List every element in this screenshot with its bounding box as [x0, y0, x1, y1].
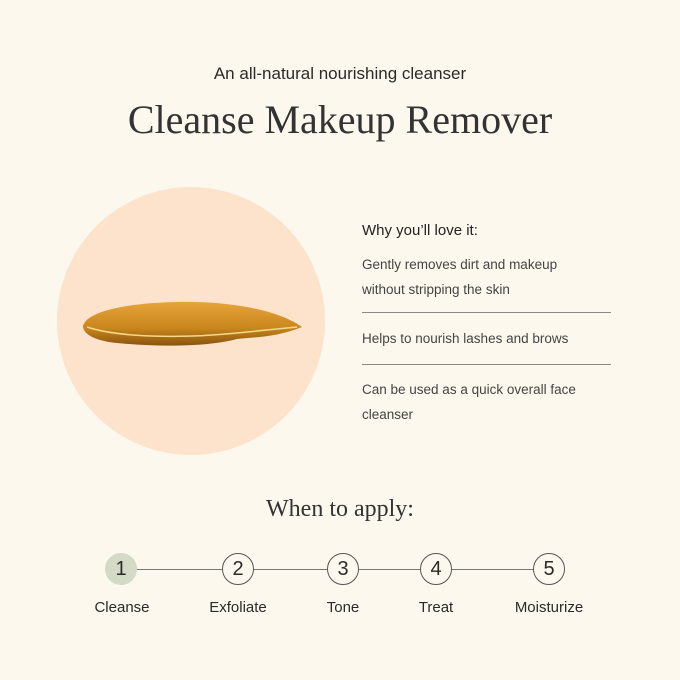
label tone: Tone: [327, 599, 359, 616]
step 2: [222, 553, 254, 585]
benefit 3: [362, 382, 576, 422]
title: Cleanse Makeup Remover: [128, 97, 552, 142]
benefit 2: Helps to nourish lashes and brows: [362, 331, 568, 346]
steps timeline: [136, 569, 534, 570]
subtitle: An all-natural nourishing cleanser: [214, 64, 466, 83]
benefit 1: [362, 257, 557, 297]
label treat: Treat: [419, 599, 453, 616]
step 4: [420, 553, 452, 585]
heading: Why you’ll love it:: [362, 222, 478, 239]
benefit 3: Can be used as a quick overall face: [362, 382, 576, 397]
step 2: 2: [232, 558, 244, 580]
benefit 1: without stripping the skin: [362, 282, 510, 297]
step 5: [533, 553, 565, 585]
step 1: [105, 553, 137, 585]
when to apply heading: When to apply:: [266, 496, 414, 522]
oil swatch: [83, 302, 302, 346]
benefit 3: cleanser: [362, 407, 413, 422]
label exfoliate: Exfoliate: [209, 599, 267, 616]
step 5: 5: [543, 558, 555, 580]
label moisturize: Moisturize: [515, 599, 583, 616]
step 4: 4: [430, 558, 442, 580]
step 1: 1: [115, 558, 127, 580]
benefit 1: Gently removes dirt and makeup: [362, 257, 557, 272]
step 3: [327, 553, 359, 585]
step 3: 3: [337, 558, 349, 580]
product image circle: [57, 187, 325, 455]
label cleanse: Cleanse: [94, 599, 150, 616]
benefits block: [362, 222, 576, 422]
